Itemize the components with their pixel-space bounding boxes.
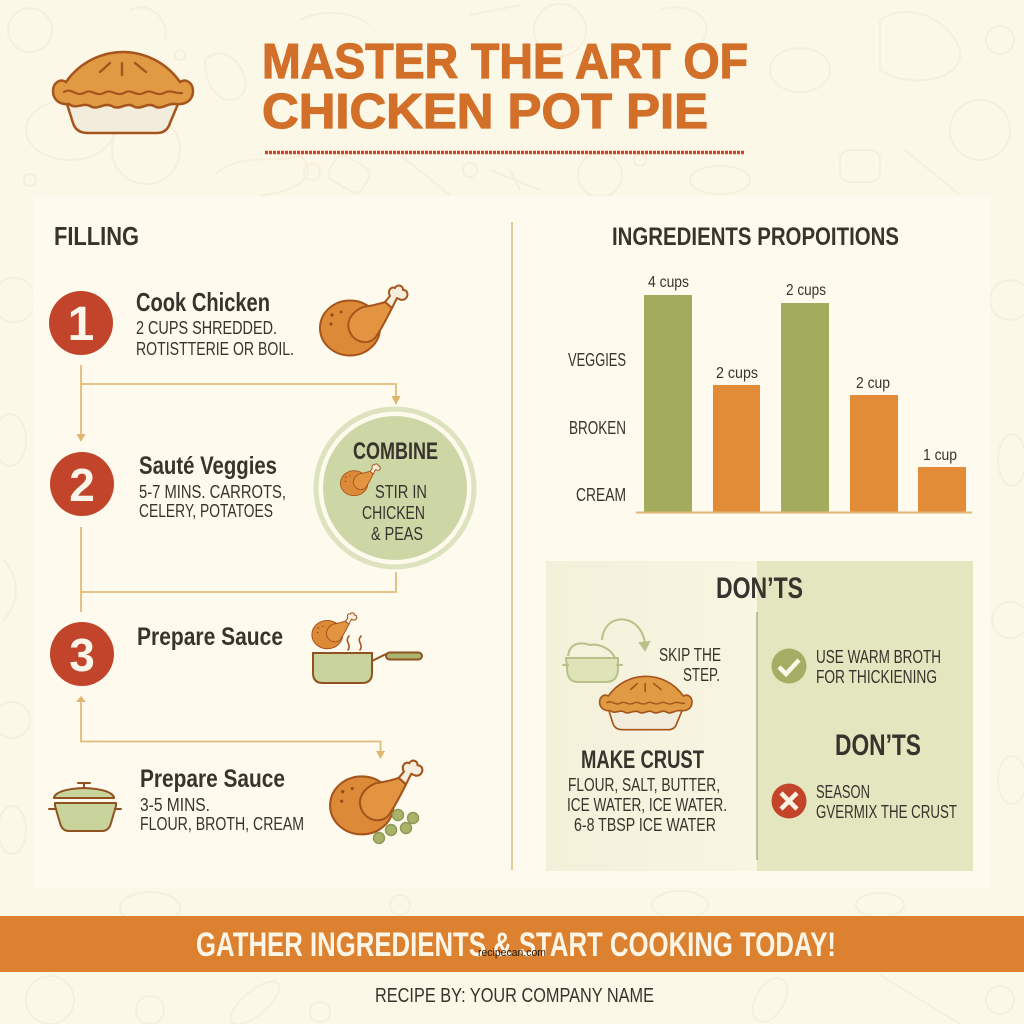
text: do: FOR THICKIENING — [816, 667, 937, 687]
y axis labels: CREAM — [576, 485, 626, 505]
step 2 text: 5-7 MINS. CARROTS, — [139, 482, 286, 502]
call-to-action banner — [0, 916, 1024, 972]
step 1 badge — [49, 291, 113, 355]
text: make crust: FLOUR, SALT, BUTTER, — [568, 775, 720, 795]
flow connectors — [76, 365, 400, 759]
call-to-action banner: recipecan.com — [478, 947, 546, 959]
step 1 badge: 1 — [68, 298, 94, 351]
text: make crust: MAKE CRUST — [581, 746, 704, 774]
text: do: USE WARM BROTH — [816, 647, 941, 667]
text: don't: SEASON — [816, 782, 870, 802]
dotted title underline — [265, 151, 744, 154]
step 1 text: ROTISTTERIE OR BOIL. — [136, 339, 294, 359]
title: MASTER THE ART OF — [262, 35, 748, 89]
combine circle: & PEAS — [371, 524, 423, 544]
step 3 text: Prepare Sauce — [137, 623, 283, 651]
combine circle — [316, 409, 474, 567]
last step text: Prepare Sauce — [140, 765, 285, 793]
icon: pot pie — [53, 52, 193, 133]
bars — [644, 295, 966, 512]
y axis labels: VEGGIES — [568, 350, 626, 370]
last step text — [140, 765, 304, 834]
text: skip the step: SKIP THE — [659, 645, 721, 665]
bar value labels: 4 cups — [648, 274, 689, 291]
title: CHICKEN POT PIE — [262, 85, 708, 139]
panel: filling — [49, 221, 474, 844]
text: skip the step — [659, 645, 721, 685]
icon: chicken leg — [320, 286, 407, 356]
text: do — [816, 647, 941, 687]
step 1 text — [136, 287, 294, 359]
bar value labels: 2 cups — [786, 282, 826, 299]
icon: small chicken — [340, 464, 380, 496]
title — [262, 35, 748, 139]
last step text: 3-5 MINS. — [140, 795, 210, 815]
bar value labels: 1 cup — [923, 447, 957, 464]
bar value labels: 2 cups — [716, 365, 758, 382]
heading: don'ts: DON’TS — [716, 572, 803, 605]
text: make crust: ICE WATER, ICE WATER. — [567, 795, 727, 815]
call-to-action banner: GATHER INGREDIENTS & START COOKING TODAY! — [196, 926, 836, 964]
panel: don'ts — [546, 561, 973, 871]
step 2 text: Sauté Veggies — [139, 452, 277, 480]
step 2 badge — [50, 452, 114, 516]
step 2 text: CELERY, POTATOES — [139, 501, 273, 521]
heading: filling: FILLING — [54, 221, 139, 251]
panel: ingredients chart — [568, 223, 972, 512]
icon: check — [772, 648, 806, 684]
text: don't: GVERMIX THE CRUST — [816, 802, 957, 822]
icon: pie — [600, 676, 692, 730]
vertical panel divider — [511, 222, 513, 870]
step 1 text: 2 CUPS SHREDDED. — [136, 318, 277, 338]
text: skip the step: STEP. — [683, 665, 720, 685]
text: make crust: 6-8 TBSP ICE WATER — [574, 815, 716, 835]
combine circle: STIR IN — [375, 482, 427, 502]
y axis labels — [568, 350, 626, 505]
combine circle: CHICKEN — [362, 503, 425, 523]
step 2 badge: 2 — [69, 459, 95, 511]
heading: second don'ts: DON’TS — [835, 729, 921, 762]
icon: lidded pot — [49, 783, 121, 831]
footer credit: RECIPE BY: YOUR COMPANY NAME — [375, 985, 654, 1007]
text: don't — [816, 782, 957, 822]
y axis labels: BROKEN — [569, 418, 626, 438]
text: make crust — [567, 746, 727, 835]
icon: chicken over saucepan — [312, 613, 422, 683]
chart heading: INGREDIENTS PROPOITIONS — [612, 223, 899, 251]
bar value labels — [648, 274, 957, 464]
combine circle: COMBINE — [353, 438, 438, 465]
step 1 text: Cook Chicken — [136, 287, 270, 317]
step 3 badge — [50, 622, 114, 686]
last step text: FLOUR, BROTH, CREAM — [140, 814, 304, 834]
main panel — [33, 196, 990, 888]
icon: cross — [772, 784, 806, 818]
icon: dough pot with arrow — [563, 619, 649, 682]
step 2 text — [139, 452, 286, 521]
icon: chicken with peas — [330, 761, 422, 844]
bar value labels: 2 cup — [856, 375, 890, 392]
step 3 badge: 3 — [69, 629, 95, 681]
